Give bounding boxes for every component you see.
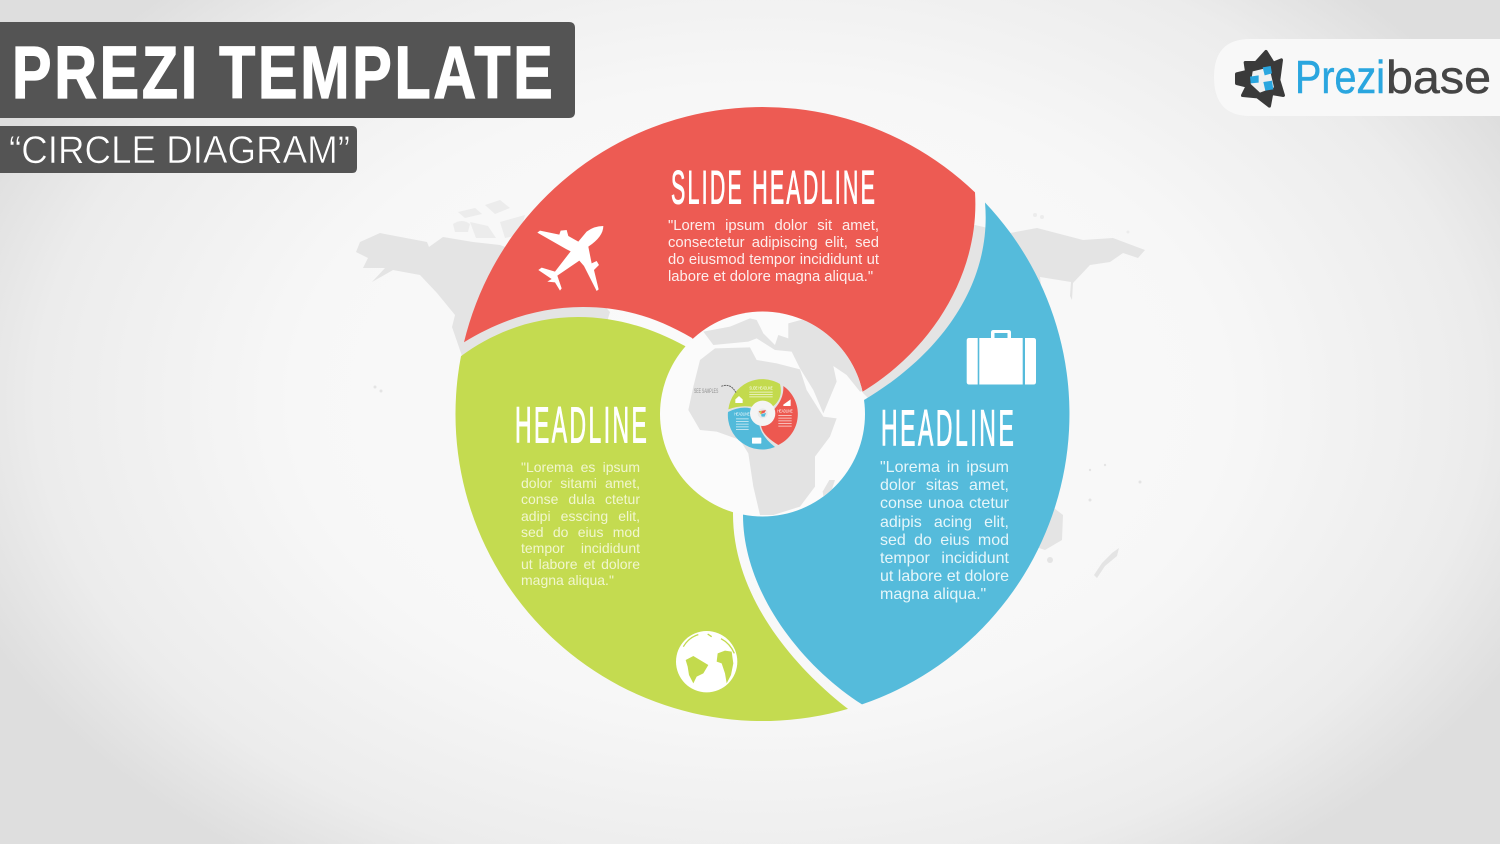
central globe hub xyxy=(660,312,868,516)
text block: blue segment: magna aliqua." xyxy=(880,586,986,603)
text block: blue segment xyxy=(880,459,1009,609)
text block: blue segment: adipis acing elit, xyxy=(880,514,1009,531)
panel: green headline segment xyxy=(455,317,848,721)
mini labels: SLIDE HEADLINE xyxy=(749,385,773,391)
text block: green segment: magna aliqua." xyxy=(521,572,614,588)
blue segment shape xyxy=(743,202,1069,704)
logo wordmark: Prezi xyxy=(1295,51,1385,103)
mini hub xyxy=(750,401,775,426)
mini circle diagram: HEADLINE xyxy=(734,412,750,418)
text block: green segment: adipi esscing elit, xyxy=(521,508,640,524)
logo mark xyxy=(1237,52,1283,106)
arrow xyxy=(721,385,736,393)
icon: suitcase xyxy=(967,330,1036,384)
mini blue segment xyxy=(728,408,775,449)
text block: red segment: do eiusmod tempor incididunt ut xyxy=(668,252,879,268)
heading: headline: HEADLINE xyxy=(881,400,1014,457)
logo: Prezibase xyxy=(1214,39,1500,116)
text block: blue segment: "Lorema in ipsum xyxy=(880,459,1009,476)
logo wordmark xyxy=(1295,51,1491,103)
title banner xyxy=(0,22,575,118)
text block: red segment: "Lorem ipsum dolor sit amet, xyxy=(668,218,879,234)
text block: blue segment: sed do eius mod xyxy=(880,532,1009,549)
text block: green segment: conse dula ctetur xyxy=(521,491,640,507)
mini red segment xyxy=(761,386,798,445)
heading: slide headline: SLIDE HEADLINE xyxy=(671,161,875,214)
text block: green segment: "Lorema es ipsum xyxy=(521,459,640,475)
text block: blue segment: dolor sitas amet, xyxy=(880,477,1009,494)
subtitle text: “CIRCLE DIAGRAM” xyxy=(9,129,350,172)
text block: red segment: consectetur adipiscing elit, sed xyxy=(668,235,879,251)
see samples note: SEE SAMPLES xyxy=(694,388,719,395)
text block: green segment: dolor sitami amet, xyxy=(521,475,640,491)
text block: red segment xyxy=(668,218,879,288)
globe continents xyxy=(688,318,868,515)
mini green segment xyxy=(728,379,781,409)
text block: green segment: sed do eius mod xyxy=(521,524,640,540)
heading: headline: HEADLINE xyxy=(515,397,647,454)
text block: blue segment: ut labore et dolore xyxy=(880,568,1009,585)
icon: airplane xyxy=(537,226,603,291)
panel: red slide headline segment xyxy=(464,107,975,420)
text block: green segment: tempor incididunt xyxy=(521,540,640,556)
green segment shape xyxy=(455,317,848,721)
red segment shape xyxy=(464,107,975,420)
logo wordmark: base xyxy=(1386,51,1491,103)
text block: red segment: labore et dolore magna aliqua." xyxy=(668,269,873,285)
text block: green segment: ut labore et dolore xyxy=(521,556,640,572)
subtitle banner xyxy=(0,126,357,173)
text block: blue segment: tempor incididunt xyxy=(880,550,1009,567)
title text: PREZI TEMPLATE xyxy=(12,32,553,115)
mini circle diagram xyxy=(694,379,798,449)
background world map xyxy=(356,200,1145,578)
mini circle diagram: HEADLINE xyxy=(777,408,793,414)
panel: blue headline segment xyxy=(743,202,1069,704)
text block: green segment xyxy=(521,459,640,591)
text block: blue segment: conse unoa ctetur xyxy=(880,495,1009,512)
icon: globe xyxy=(676,631,737,692)
